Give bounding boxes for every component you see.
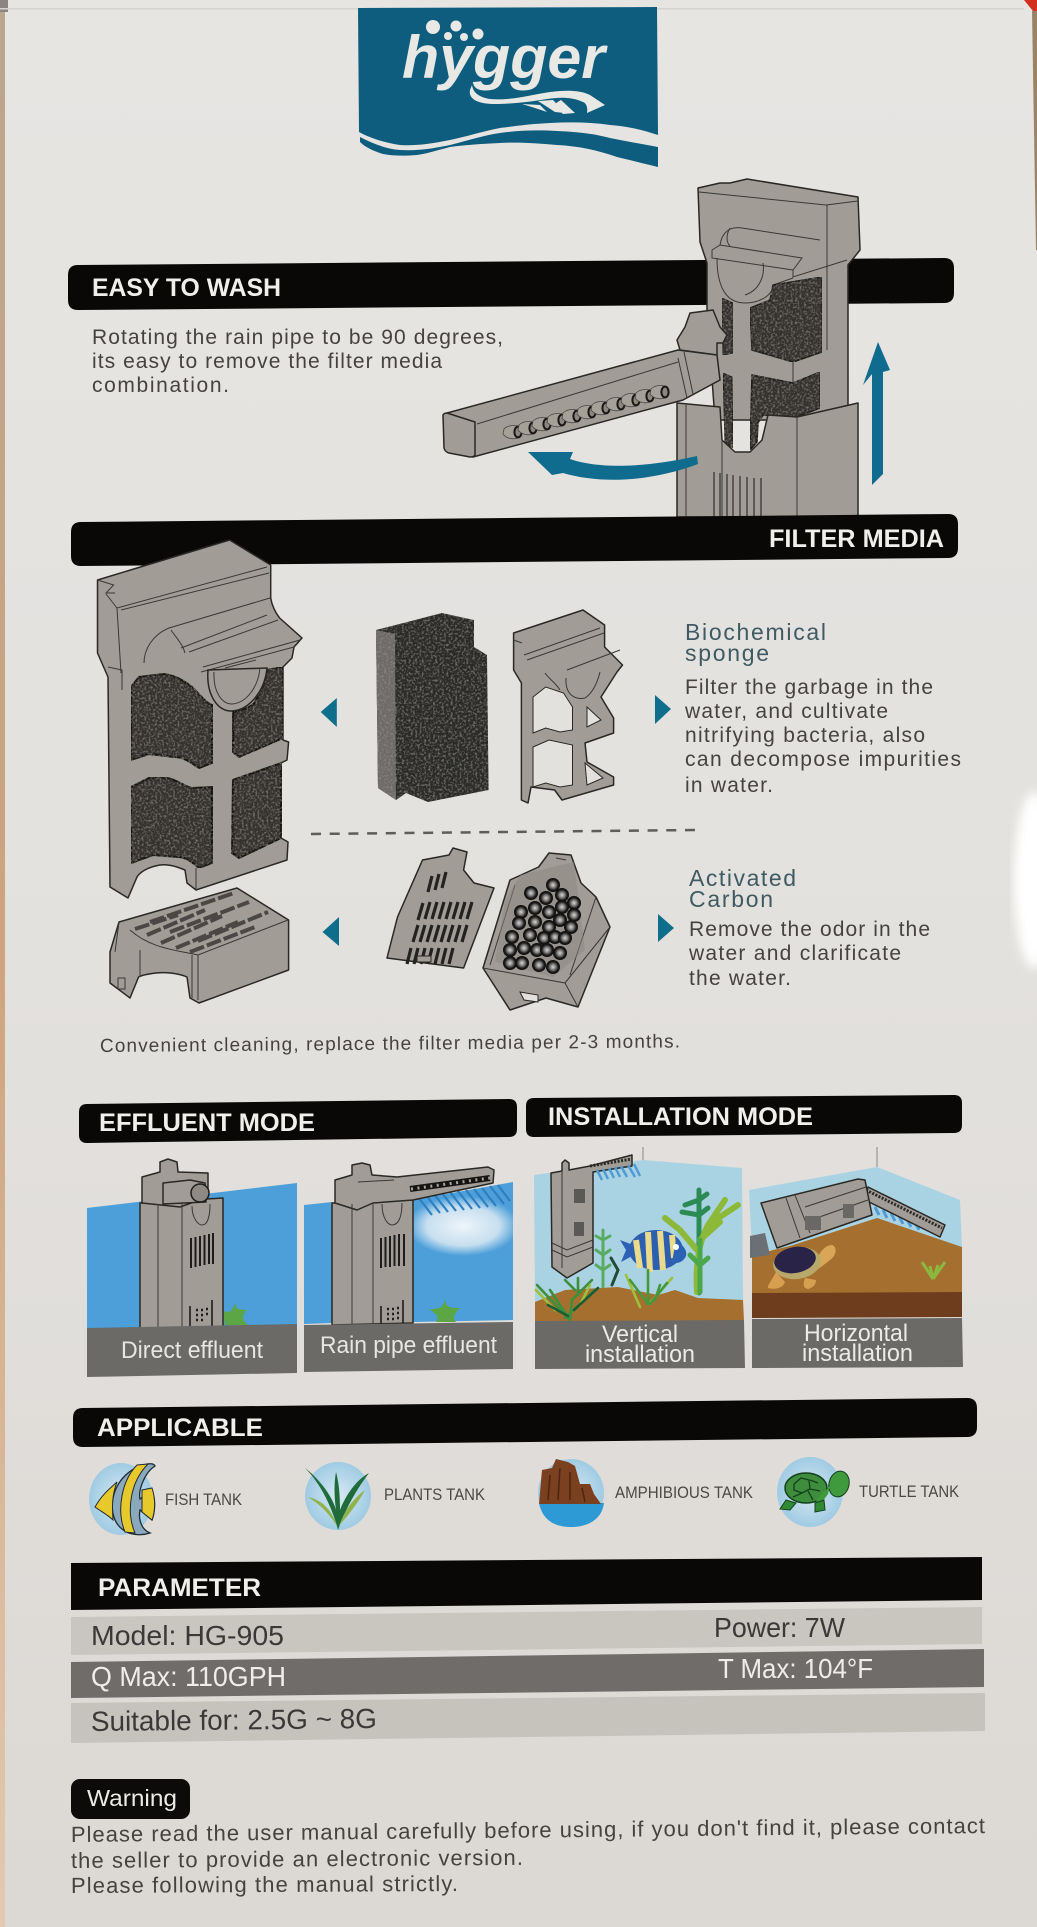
filter with rain pipe illustration [68,179,954,517]
plant [430,1300,460,1322]
bubbles [426,20,484,41]
warning badge: Warning [87,1785,177,1811]
label: Vertical [602,1321,678,1348]
text: activated carbon: Remove the odor in the [689,918,930,941]
plant [922,1262,945,1279]
text: biochemical sponge: Filter the garbage in the [685,676,933,699]
text: activated carbon [688,865,930,990]
text: biochemical sponge: Biochemical [685,619,826,645]
label: Direct effluent [121,1337,263,1364]
row 2: T Max: 104°F [718,1653,873,1684]
small empty frame [514,610,622,803]
mini filter [551,1155,640,1278]
filter [332,1163,494,1325]
tall plants [596,1190,738,1293]
panel: horizontal installation [749,1147,963,1368]
heading bar: effluent mode: EFFLUENT MODE [99,1109,315,1137]
heading bar: easy to wash [68,258,954,310]
text: activated carbon: the water. [689,967,791,990]
panel: rain pipe effluent [304,1163,519,1372]
panel: direct effluent [87,1159,297,1377]
label [752,1318,963,1368]
text: biochemical sponge: in water. [685,774,773,797]
heading bar: parameter: PARAMETER [98,1574,261,1602]
text: rotating the rain pipe: Rotating the rain pipe to be 90 degrees, [92,326,503,349]
logo: hygger [358,7,658,167]
label: installation [802,1340,913,1367]
row 1 [71,1607,982,1655]
rain pipe [443,310,727,457]
row 1: Power: 7W [714,1612,846,1643]
heading bar: filter media: FILTER MEDIA [769,525,944,553]
text: activated carbon: Activated [689,865,796,891]
heading bar: easy to wash: EASY TO WASH [92,274,281,302]
heading bar: parameter [71,1557,982,1610]
warning text: Please read the user manual carefully before using, if you don't find it, please contact [71,1813,985,1847]
label [535,1320,745,1369]
warning text: the seller to provide an electronic version. [71,1845,523,1873]
mini filter [761,1179,872,1248]
label: installation [585,1341,695,1368]
carbon box with balls [483,853,610,1010]
text: rotating the rain pipe: its easy to remove the filter media [92,350,442,373]
label: amphibious tank: AMPHIBIOUS TANK [615,1483,754,1502]
label: plants tank: PLANTS TANK [384,1485,486,1504]
swoosh [470,85,605,114]
icon: plants tank [305,1462,371,1530]
mini pipe and water [865,1187,945,1237]
heading bar: installation mode: INSTALLATION MODE [548,1103,813,1131]
caption: convenient cleaning: Convenient cleaning, replace the filter media per 2-3 months. [100,1031,680,1057]
heading bar: applicable [73,1398,977,1447]
sponge block [376,613,489,802]
label [304,1322,513,1372]
warning text: Please following the manual strictly. [71,1871,458,1898]
arrow markers [321,695,674,946]
heading bar: applicable: APPLICABLE [97,1414,263,1442]
row 1: Model: HG-905 [91,1620,284,1651]
label [87,1324,297,1377]
substrate [752,1218,962,1294]
icon: turtle tank [777,1457,852,1527]
carbon lid [387,848,494,968]
label: turtle tank: TURTLE TANK [859,1482,960,1501]
heading bar: installation mode [526,1095,962,1137]
text: rotating the rain pipe [92,326,503,397]
label: Horizontal [804,1320,908,1347]
panel: vertical installation [534,1147,745,1369]
dashed divider [311,830,696,834]
text: activated carbon: water and clarificate [688,942,901,965]
water splash [407,1196,519,1256]
row 2: Q Max: 110GPH [91,1661,286,1692]
filter media basket [698,179,860,450]
row 3 [71,1693,985,1743]
text: biochemical sponge: sponge [685,640,769,666]
text: biochemical sponge: nitrifying bacteria, also [685,724,925,747]
warning text [71,1813,985,1898]
arrow: lift up [863,342,890,485]
text: activated carbon: Carbon [689,886,773,912]
text: biochemical sponge: water, and cultivate [684,700,888,723]
large assembled filter cartridge [98,540,302,898]
icon: fish tank [89,1463,155,1535]
label: Rain pipe effluent [320,1332,497,1359]
sponge pads [131,667,283,868]
heading bar: filter media [71,514,958,566]
row 2 [71,1649,984,1698]
heading bar: effluent mode [79,1099,517,1143]
pump body [677,403,858,517]
substrate [535,1287,744,1321]
label: fish tank: FISH TANK [165,1490,243,1509]
text: biochemical sponge [684,619,961,797]
text: rotating the rain pipe: combination. [92,374,229,397]
turtle [768,1244,836,1289]
row 3: Suitable for: 2.5G ~ 8G [91,1703,377,1737]
warning badge [71,1779,190,1819]
fish [620,1230,686,1272]
icon: amphibious tank [538,1459,604,1527]
filter [140,1159,223,1329]
plant [223,1303,248,1325]
brand name: hygger [402,24,609,91]
grass [536,1270,672,1320]
carbon media tray [110,888,289,1003]
arrow: rotate [528,452,698,480]
parameter table [71,1607,985,1743]
text: biochemical sponge: can decompose impurities [685,748,961,771]
rock [750,1233,770,1258]
